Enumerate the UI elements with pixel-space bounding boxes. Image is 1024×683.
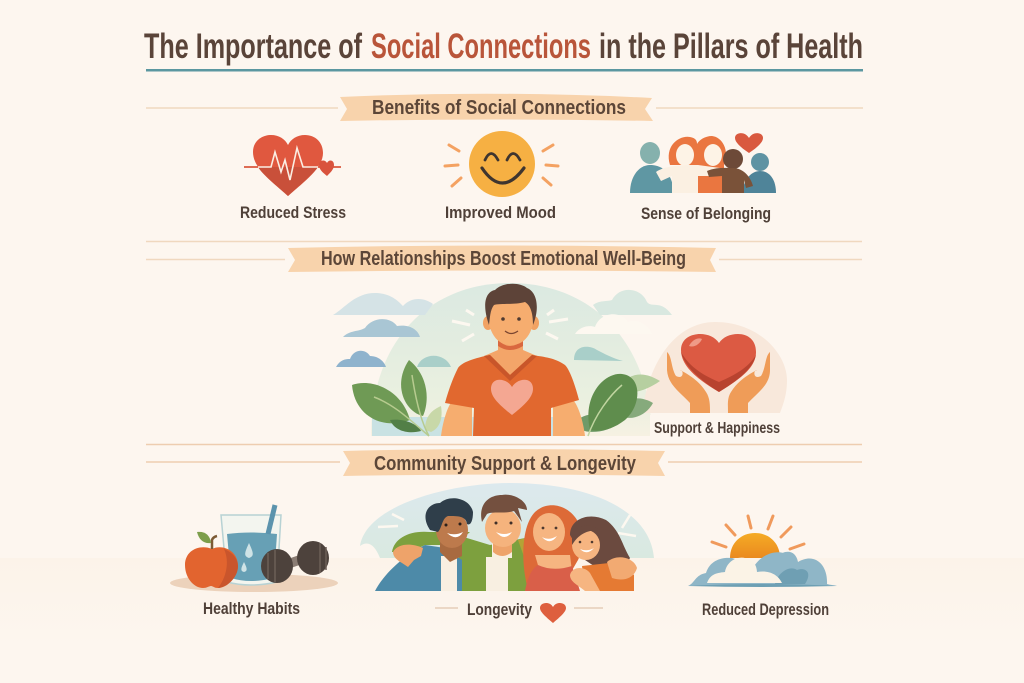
friend: red hair xyxy=(523,505,581,591)
icon: sun behind clouds xyxy=(688,516,837,587)
panel: community support and longevity xyxy=(170,449,837,623)
label: improved mood: Improved Mood xyxy=(445,203,556,222)
label: longevity xyxy=(435,600,603,623)
icon: hands holding heart xyxy=(642,322,787,413)
label: sense of belonging: Sense of Belonging xyxy=(641,204,771,223)
dumbbell xyxy=(261,541,329,583)
label: healthy habits: Healthy Habits xyxy=(203,599,300,618)
label: support and happiness xyxy=(650,414,790,437)
illustration: person in landscape xyxy=(333,283,790,437)
right leaves xyxy=(580,374,660,436)
label: reduced depression: Reduced Depression xyxy=(702,600,829,619)
icon: apple, water and dumbbell xyxy=(170,505,338,592)
title: in the Pillars of Health xyxy=(599,27,863,66)
panel: benefits of social connections xyxy=(240,94,776,223)
panel: how relationships boost emotional well-being xyxy=(288,246,790,437)
label: longevity: Longevity xyxy=(467,600,532,619)
icon: heart with pulse xyxy=(244,135,341,196)
heading: community support: Community Support & Longevity xyxy=(374,453,637,475)
title: Social Connections xyxy=(371,27,591,66)
person xyxy=(441,284,585,436)
heading: emotional well-being xyxy=(288,246,716,272)
heading: emotional well-being: How Relationships Boost Emotional Well-Being xyxy=(321,248,686,270)
friend: blue jacket xyxy=(375,498,473,591)
icon: group hugging xyxy=(630,133,776,193)
icon: smiling face xyxy=(445,131,558,197)
title: The Importance of xyxy=(144,27,362,66)
friend: long brown hair xyxy=(570,516,637,591)
title underline xyxy=(146,69,863,72)
friend: green shirt xyxy=(392,495,533,591)
left leaves xyxy=(352,360,442,436)
heading: benefits: Benefits of Social Connections xyxy=(372,97,626,119)
apple xyxy=(185,532,238,588)
label: reduced stress: Reduced Stress xyxy=(240,203,346,222)
label: support and happiness: Support & Happiness xyxy=(654,420,780,437)
heading: community support xyxy=(343,449,665,476)
illustration: group of friends xyxy=(360,483,654,591)
glass of water xyxy=(221,505,281,585)
title xyxy=(144,27,863,66)
